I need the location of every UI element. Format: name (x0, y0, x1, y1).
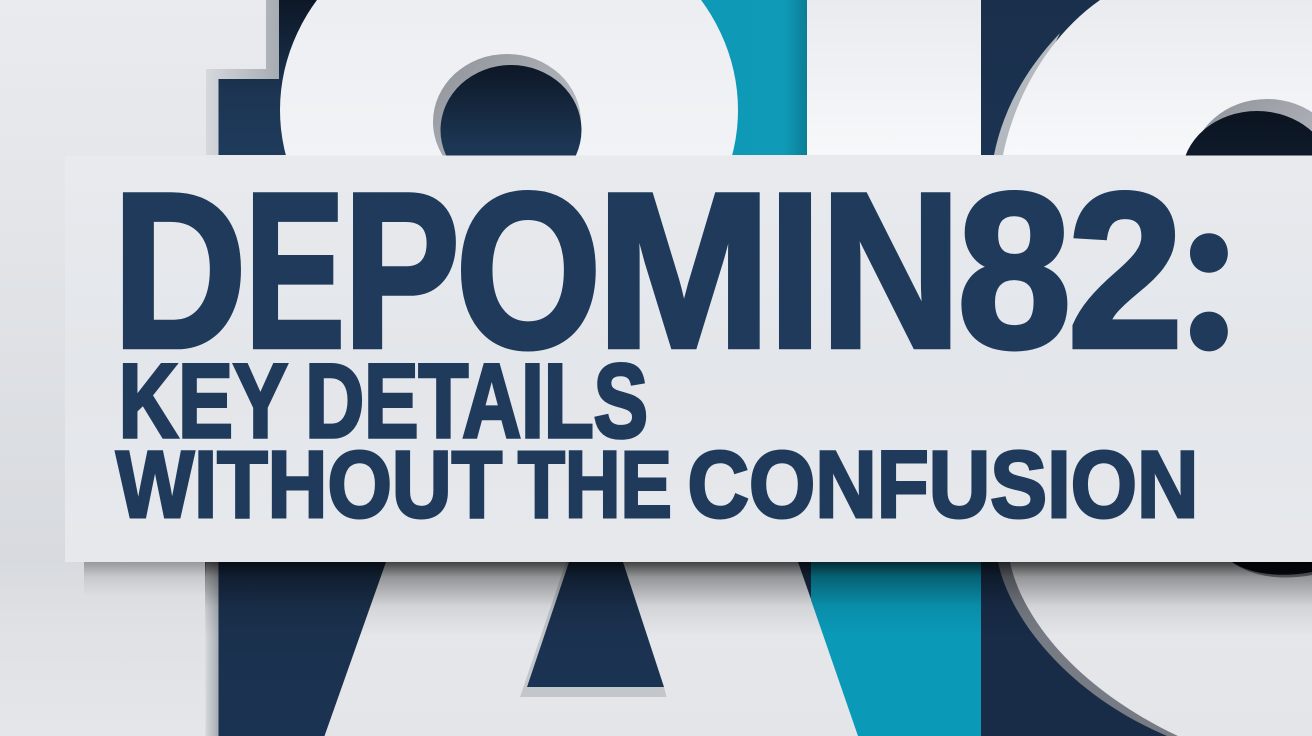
bevel of right hole (1192, 99, 1312, 231)
navy right hole (1182, 111, 1312, 239)
navy band top right (981, 0, 1105, 155)
large white ring segment (280, 0, 738, 312)
subtitle line one: DETAILS (305, 343, 648, 460)
grey lip of hole sliver (1232, 562, 1312, 577)
bevel of ring hole (433, 54, 581, 190)
teal band top (690, 0, 808, 155)
navy ring hole (440, 65, 582, 195)
white curved shape bottom right (1010, 562, 1312, 736)
main title: 8 (957, 148, 1071, 394)
white lower field (218, 562, 1312, 736)
main title: 2 (1068, 148, 1183, 394)
navy band bottom right (981, 562, 1178, 736)
navy backing block top left (218, 0, 330, 155)
white panel between teal and navy (807, 0, 981, 155)
subtitle line two: THE (518, 432, 672, 538)
panel background (65, 156, 1312, 562)
panel cast shadow on shapes (205, 562, 1312, 637)
subtitle line two (116, 432, 1198, 538)
triangle bevel (520, 562, 666, 697)
main title: D (113, 148, 247, 394)
navy triangle (527, 562, 664, 687)
main title: O (455, 147, 602, 394)
stepped bevel top left (206, 0, 279, 155)
subtitle line one (119, 343, 648, 460)
bevel of lower right curve (998, 562, 1180, 736)
white curved shape top right (1003, 0, 1312, 155)
navy sliver beside teal (798, 562, 812, 602)
main title: E (245, 148, 345, 395)
main title: I (768, 146, 822, 394)
bevel of top right curve (994, 33, 1060, 155)
main title (113, 108, 1243, 408)
vertical bevel bottom left (206, 562, 218, 736)
title panel (65, 108, 1312, 562)
main title: N (820, 148, 961, 394)
subtitle line two: CONFUSION (688, 432, 1198, 538)
navy hole sliver (1232, 562, 1312, 575)
subtitle line one: KEY (119, 343, 288, 460)
main title: P (343, 148, 460, 394)
main title: : (1175, 108, 1243, 408)
panel cast shadow on wall (84, 562, 206, 596)
main title: M (596, 147, 771, 394)
subtitle line two: WITHOUT (116, 432, 502, 538)
navy slanted block bottom left (218, 562, 386, 736)
top cut-out shapes (206, 0, 1312, 312)
bottom cut-out shapes (84, 562, 1312, 736)
teal band bottom (811, 562, 981, 736)
